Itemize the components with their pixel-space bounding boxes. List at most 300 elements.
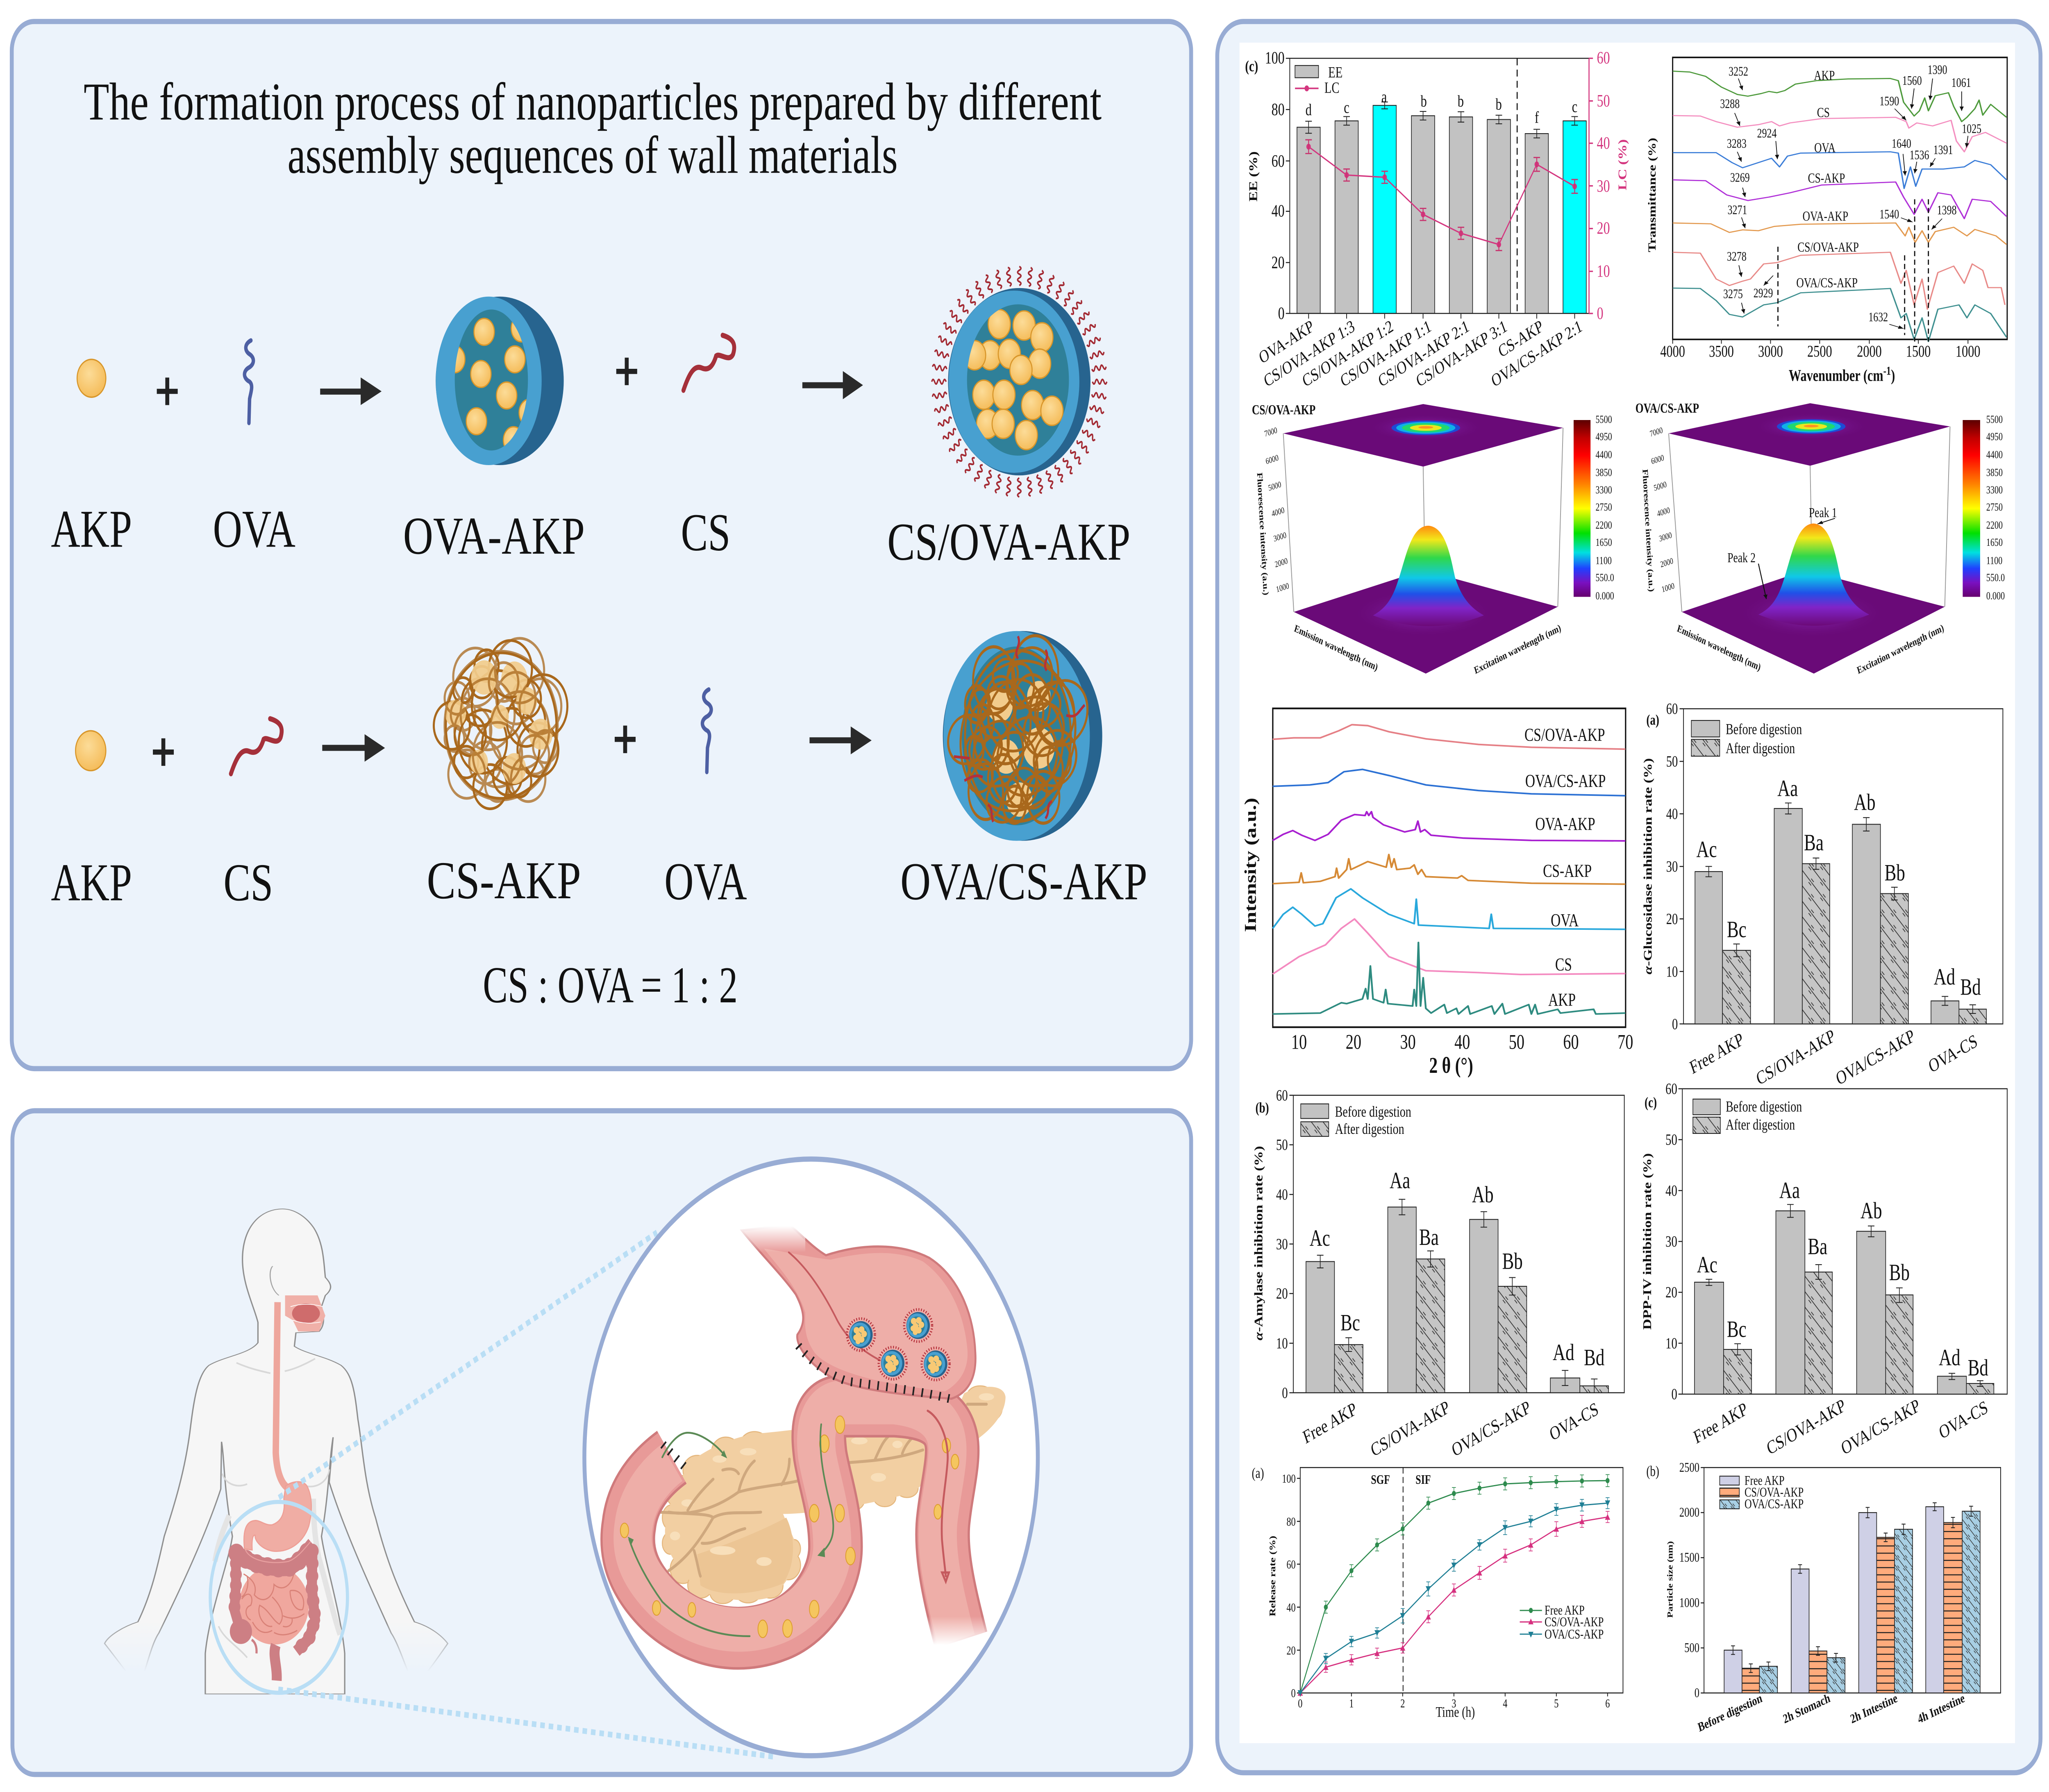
left tick labels: 100 xyxy=(1265,49,1285,68)
value labels: Ad xyxy=(1939,1345,1960,1370)
value labels: Ab xyxy=(1472,1182,1494,1208)
colorbar labels: 2200 xyxy=(1595,520,1612,531)
arrow: red xyxy=(928,1411,949,1582)
chart: 3D fluorescence OVA/CS-AKP: Excitation wavelength (nm) xyxy=(1856,622,1945,676)
peak annotations: 1632 xyxy=(1868,310,1888,325)
peak annotations: 3278 xyxy=(1727,250,1747,264)
x axis title: 2 θ (°) xyxy=(1429,1054,1473,1078)
LC line xyxy=(1308,147,1574,245)
sutures xyxy=(663,1346,952,1470)
tick labels: 40 xyxy=(1666,806,1678,823)
category labels: CS/OVA-AKP 2:1 xyxy=(1376,316,1472,391)
legend xyxy=(1295,64,1343,97)
categories xyxy=(1300,1396,1601,1460)
peak annotations: 3252 xyxy=(1729,65,1748,79)
chart: FTIR spectra xyxy=(1646,57,2007,384)
axis titles: Time (h) xyxy=(1436,1703,1475,1720)
chart: release rate xyxy=(1252,1465,1623,1720)
icon: intestine tube xyxy=(628,1402,961,1640)
axis labels: 3000 xyxy=(1658,530,1673,544)
chart: 3D fluorescence CS/OVA-AKP: Fluorescence intensity (a.u.) xyxy=(1255,472,1271,596)
icon: CS/OVA-AKP particle xyxy=(932,266,1107,497)
peak labels: Peak 2 xyxy=(1727,550,1756,566)
legend: Before digestion xyxy=(1335,1104,1411,1120)
left tick labels: 40 xyxy=(1272,202,1285,221)
panel letter: (a) xyxy=(1252,1465,1264,1481)
category labels xyxy=(1257,316,1585,391)
letters: c xyxy=(1344,98,1349,117)
chart: 3D fluorescence CS/OVA-AKP: Excitation wavelength (nm) xyxy=(1473,622,1562,676)
categories: 2h Intestine xyxy=(1849,1691,1899,1726)
title: The formation process of nanoparticles prepared by different xyxy=(84,72,1102,131)
x ticks xyxy=(1291,1030,1633,1054)
title: OVA/CS-AKP xyxy=(1636,401,1699,416)
legend xyxy=(1301,1104,1411,1138)
left tick labels: 20 xyxy=(1272,254,1285,273)
axis titles: Wavenumber (cm xyxy=(1789,366,1883,384)
right tick labels xyxy=(1597,49,1610,323)
categories: CS/OVA-AKP xyxy=(1754,1024,1837,1089)
tick labels: 60 xyxy=(1666,700,1678,718)
arrow xyxy=(320,377,382,405)
row 2 labels: OVA/CS-AKP xyxy=(900,852,1147,911)
curve names: CS/OVA-AKP xyxy=(1524,725,1605,745)
chart: XRD patterns xyxy=(1241,709,1633,1078)
curve names: OVA/CS-AKP xyxy=(1796,275,1858,291)
arrow xyxy=(809,727,872,754)
categories: OVA-CS xyxy=(1547,1398,1601,1445)
curve names: CS xyxy=(1817,105,1830,120)
chart: particle size xyxy=(1646,1460,2001,1735)
right tick labels: 30 xyxy=(1597,177,1610,196)
letters: b xyxy=(1421,92,1427,110)
axis labels: 5000 xyxy=(1653,479,1667,493)
value labels xyxy=(1697,1177,1988,1381)
value labels: Ac xyxy=(1696,836,1717,862)
right tick labels: 10 xyxy=(1597,262,1610,281)
letters: f xyxy=(1535,108,1539,127)
tick labels xyxy=(1679,1460,1699,1700)
panel: digestion xyxy=(12,1111,1191,1774)
curve names: OVA-AKP xyxy=(1535,814,1595,834)
value labels: Ba xyxy=(1808,1233,1827,1259)
peak annotations: 3283 xyxy=(1727,136,1747,151)
axis titles xyxy=(1245,58,1629,202)
arrow xyxy=(322,734,385,762)
peak annotations: 3269 xyxy=(1730,170,1750,185)
y axis title: Release rate (%) xyxy=(1268,1536,1277,1616)
tick labels: 5 xyxy=(1554,1697,1558,1710)
row 1 labels xyxy=(51,499,1130,571)
peak annotations: 3275 xyxy=(1723,287,1743,301)
panel letter: (c) xyxy=(1645,1095,1657,1111)
plus sign xyxy=(616,358,637,385)
category labels: CS/OVA-AKP 1:3 xyxy=(1261,316,1357,391)
EE bars xyxy=(1297,102,1586,313)
tick labels: 40 xyxy=(1665,1182,1677,1199)
categories: OVA/CS-AKP xyxy=(1449,1396,1533,1460)
categories: Before digestion xyxy=(1697,1691,1764,1735)
x tick labels: 3500 xyxy=(1709,342,1734,361)
panel letter: (b) xyxy=(1646,1463,1659,1479)
right tick labels: 50 xyxy=(1597,92,1610,111)
legend: After digestion xyxy=(1726,740,1795,757)
axes xyxy=(1286,58,1589,319)
x ticks: 20 xyxy=(1346,1030,1361,1054)
value labels: Bb xyxy=(1889,1259,1910,1285)
value labels: Ba xyxy=(1804,829,1824,855)
x tick labels: 1000 xyxy=(1956,342,1981,361)
title: CS/OVA-AKP xyxy=(1252,402,1315,418)
plus sign xyxy=(153,738,174,766)
tick labels xyxy=(1666,700,1678,1033)
colorbar labels: 4400 xyxy=(1986,449,2003,461)
peak annotations: 1640 xyxy=(1892,136,1911,151)
axis labels: 2000 xyxy=(1274,556,1288,570)
peak labels: Peak 1 xyxy=(1809,505,1837,520)
peak annotations: 1540 xyxy=(1879,207,1899,222)
colorbar labels: 0.000 xyxy=(1595,590,1614,602)
value labels: Ad xyxy=(1553,1339,1574,1365)
colorbar labels: 4950 xyxy=(1986,431,2003,443)
colorbar labels: 4400 xyxy=(1595,449,1612,461)
value labels: Bb xyxy=(1502,1248,1523,1274)
letters: b xyxy=(1458,92,1464,110)
plus sign xyxy=(157,377,178,405)
colorbar labels: 0.000 xyxy=(1986,590,2005,602)
tick labels: 40 xyxy=(1286,1601,1296,1614)
left tick labels: 60 xyxy=(1272,152,1285,171)
colorbar labels: 4950 xyxy=(1595,431,1612,443)
colorbar labels: 3300 xyxy=(1595,484,1612,496)
released capsules xyxy=(620,1416,959,1638)
row 2 labels: CS xyxy=(223,853,273,912)
peak annotations: 1398 xyxy=(1937,203,1957,218)
region labels xyxy=(1371,1473,1431,1487)
tick labels: 1 xyxy=(1349,1697,1354,1710)
categories: OVA-CS xyxy=(1936,1396,1990,1443)
tick labels: 0 xyxy=(1671,1386,1677,1403)
categories: 2h Stomach xyxy=(1781,1691,1832,1726)
letters: b xyxy=(1496,95,1502,113)
left tick labels: 80 xyxy=(1272,100,1285,119)
CS/OVA-AKP curve xyxy=(1300,1511,1608,1693)
category labels: CS/OVA-AKP 1:1 xyxy=(1338,316,1433,391)
error bars xyxy=(1733,1503,1971,1672)
chart: 3D fluorescence CS/OVA-AKP: Emission wavelength (nm) xyxy=(1293,622,1379,673)
right tick labels: 20 xyxy=(1597,219,1610,238)
axis titles: (c) xyxy=(1245,58,1258,75)
ratio caption: CS : OVA = 1 : 2 xyxy=(483,957,738,1014)
left tick labels: 0 xyxy=(1278,304,1285,323)
peak annotations: 1560 xyxy=(1902,74,1922,88)
tick labels: 1000 xyxy=(1679,1595,1699,1610)
value labels xyxy=(1696,775,1981,1000)
value labels: Bd xyxy=(1960,974,1981,1000)
value labels: Ad xyxy=(1934,964,1955,990)
curve names: CS-AKP xyxy=(1543,861,1592,881)
peak annotations: 1061 xyxy=(1951,76,1971,90)
axis title: α-Amylase inhibition rate (%) xyxy=(1252,1146,1265,1340)
tick labels: 30 xyxy=(1276,1236,1288,1253)
tick labels: 4 xyxy=(1503,1697,1507,1710)
SGF/SIF divider xyxy=(1403,1467,1404,1693)
curve names: OVA-AKP xyxy=(1803,209,1848,224)
axis titles: EE (%) xyxy=(1247,151,1260,202)
curve names: OVA xyxy=(1551,911,1579,930)
tick labels: 100 xyxy=(1282,1472,1296,1485)
categories: Free AKP xyxy=(1687,1028,1746,1078)
legend: Free AKP xyxy=(1745,1473,1785,1488)
chart: 3D fluorescence CS/OVA-AKP xyxy=(1252,402,1614,676)
peak annotations: 1391 xyxy=(1933,143,1953,157)
legend: Before digestion xyxy=(1726,721,1802,738)
value labels: Ab xyxy=(1860,1198,1882,1224)
tick labels: 20 xyxy=(1666,911,1678,928)
tick labels: 30 xyxy=(1666,858,1678,875)
category labels: OVA-AKP xyxy=(1257,316,1316,368)
tick labels: 50 xyxy=(1665,1131,1677,1149)
categories: OVA/CS-AKP xyxy=(1838,1395,1922,1459)
bars xyxy=(1695,803,1986,1024)
letters xyxy=(1306,88,1577,127)
axis labels: 4000 xyxy=(1271,505,1285,519)
region labels: SIF xyxy=(1415,1473,1431,1487)
categories: Free AKP xyxy=(1691,1398,1750,1448)
title: assembly sequences of wall materials xyxy=(288,125,898,184)
row 2: OVA/CS-AKP assembly xyxy=(51,614,1147,912)
colorbar labels: 1100 xyxy=(1595,555,1612,567)
axis titles: -1 xyxy=(1883,364,1891,377)
peak annotations: 2929 xyxy=(1754,286,1773,300)
y axis title: Intensity (a.u.) xyxy=(1241,798,1260,932)
peak annotations: 1390 xyxy=(1928,63,1947,77)
bars xyxy=(1724,1507,1980,1693)
axis labels xyxy=(1263,425,1290,595)
axis labels: 4000 xyxy=(1656,505,1671,519)
panel: formation process xyxy=(12,21,1191,1069)
legend: OVA/CS-AKP xyxy=(1745,1497,1804,1512)
letters: a xyxy=(1381,88,1387,106)
icon: CS chain xyxy=(231,719,282,774)
categories: 4h Intestine xyxy=(1916,1691,1966,1726)
x tick labels: 2500 xyxy=(1807,342,1832,361)
curve names: AKP xyxy=(1548,990,1576,1010)
colorbar labels xyxy=(1986,414,2005,602)
peak annotations: 3288 xyxy=(1720,97,1740,111)
region labels: SGF xyxy=(1371,1473,1390,1487)
zoom ring xyxy=(210,1502,348,1693)
row 2 labels xyxy=(51,851,1147,912)
axis labels: 6000 xyxy=(1650,453,1665,466)
x tick labels: 4000 xyxy=(1660,342,1685,361)
axis title: Particle size (nm) xyxy=(1666,1541,1674,1618)
tick labels xyxy=(1282,1472,1610,1710)
legend: OVA/CS-AKP xyxy=(1545,1627,1604,1642)
legend: EE xyxy=(1328,64,1343,81)
curve names: CS xyxy=(1555,954,1572,974)
x tick labels: 3000 xyxy=(1758,342,1783,361)
axis title: α-Glucosidase inhibition rate (%) xyxy=(1642,758,1654,974)
chart: 3D fluorescence OVA/CS-AKP: Fluorescence intensity (a.u.) xyxy=(1641,469,1656,592)
tick labels xyxy=(1665,1081,1677,1403)
curve names xyxy=(1524,725,1606,1010)
tick labels: 10 xyxy=(1276,1335,1288,1352)
value labels: Bb xyxy=(1885,860,1905,886)
chart: alpha-glucosidase xyxy=(1642,700,2003,1089)
colorbar labels: 2750 xyxy=(1986,502,2003,513)
arrow xyxy=(802,371,863,399)
right tick labels: 0 xyxy=(1597,304,1604,323)
tick labels: 6 xyxy=(1605,1697,1610,1710)
category labels: OVA/CS-AKP 2:1 xyxy=(1489,316,1585,391)
categories xyxy=(1697,1691,1966,1735)
curve names: OVA xyxy=(1814,140,1836,156)
x tick labels: 1500 xyxy=(1906,342,1931,361)
value labels: Bc xyxy=(1727,916,1747,942)
chart: 3D fluorescence OVA/CS-AKP: Emission wavelength (nm) xyxy=(1676,622,1762,673)
categories xyxy=(1691,1395,1990,1459)
tick labels: 60 xyxy=(1665,1081,1677,1097)
value labels xyxy=(1310,1167,1604,1370)
title xyxy=(84,72,1102,184)
peak labels xyxy=(1727,505,1837,566)
category labels: CS/OVA-AKP 3:1 xyxy=(1414,316,1509,391)
arrows: green xyxy=(628,1424,833,1636)
right tick labels: 40 xyxy=(1597,134,1610,153)
colorbar labels: 3850 xyxy=(1595,467,1612,479)
tick labels: 10 xyxy=(1665,1335,1677,1352)
bars xyxy=(1695,1204,1994,1394)
row 2 labels: OVA xyxy=(664,852,747,911)
nanoparticles in stomach xyxy=(847,1309,950,1380)
categories: CS/OVA-AKP xyxy=(1764,1395,1848,1459)
row 1: CS/OVA-AKP assembly xyxy=(51,266,1130,571)
colorbar labels: 550.0 xyxy=(1595,572,1614,584)
legend: After digestion xyxy=(1726,1117,1795,1133)
tick labels: 80 xyxy=(1286,1515,1296,1529)
icon: human body with digestive tract xyxy=(93,1209,461,1694)
row 2 labels: AKP xyxy=(51,853,132,912)
panel letter: (b) xyxy=(1255,1099,1269,1116)
tick labels: 50 xyxy=(1276,1137,1288,1154)
axis titles: ) xyxy=(1891,366,1895,384)
peak annotations: 3271 xyxy=(1728,203,1747,217)
legend xyxy=(1520,1603,1604,1642)
colorbar labels: 1100 xyxy=(1986,555,2002,567)
tick labels: 2500 xyxy=(1679,1460,1699,1475)
tick labels: 3 xyxy=(1452,1697,1456,1710)
axis title: DPP-IV inhibition rate (%) xyxy=(1641,1153,1654,1330)
categories: CS/OVA-AKP xyxy=(1368,1396,1452,1460)
value labels: Bd xyxy=(1584,1345,1604,1370)
tick labels: 0 xyxy=(1282,1385,1288,1401)
icon: OVA/CS-AKP particle xyxy=(936,620,1109,847)
zoom circle: organs xyxy=(584,1159,1038,1756)
value labels: Ac xyxy=(1697,1251,1717,1277)
axis labels: 7000 xyxy=(1649,425,1663,439)
curve names: CS/OVA-AKP xyxy=(1797,240,1859,255)
categories: Free AKP xyxy=(1300,1398,1359,1448)
peak annotations: 2924 xyxy=(1757,126,1776,141)
XRD curves xyxy=(1273,725,1625,1014)
curve names: AKP xyxy=(1814,68,1835,83)
value labels: Bc xyxy=(1340,1310,1360,1335)
right tick labels: 60 xyxy=(1597,49,1610,68)
legend xyxy=(1720,1473,1804,1512)
value labels: Aa xyxy=(1390,1167,1410,1193)
plus sign xyxy=(615,726,636,753)
row 1 labels: OVA xyxy=(213,499,295,558)
x ticks: 10 xyxy=(1291,1030,1307,1054)
tick labels: 1500 xyxy=(1679,1550,1699,1565)
legend: Before digestion xyxy=(1726,1099,1802,1115)
value labels: Bd xyxy=(1968,1355,1988,1381)
y axis title: Transmittance (%) xyxy=(1646,138,1658,252)
tick labels xyxy=(1276,1087,1288,1401)
legend: CS/OVA-AKP xyxy=(1545,1615,1604,1629)
category labels: CS/OVA-AKP 1:2 xyxy=(1300,316,1395,391)
tick labels: 20 xyxy=(1665,1284,1677,1301)
tick labels: 2 xyxy=(1400,1697,1405,1710)
row 1 labels: OVA-AKP xyxy=(403,506,585,565)
peak annotations: 1536 xyxy=(1910,148,1929,162)
tick labels: 60 xyxy=(1276,1087,1288,1104)
x ticks: 60 xyxy=(1563,1030,1579,1054)
axis labels: 5000 xyxy=(1268,479,1282,493)
row 1 labels: AKP xyxy=(51,499,132,558)
row 1 labels: CS/OVA-AKP xyxy=(887,512,1130,571)
axis titles: LC (%) xyxy=(1616,139,1629,190)
axis labels: 1000 xyxy=(1275,581,1290,595)
row 2 labels: CS-AKP xyxy=(427,851,581,910)
chart: 3D fluorescence OVA/CS-AKP xyxy=(1636,401,2005,676)
icon: pancreas xyxy=(659,1386,1006,1603)
letters: c xyxy=(1572,98,1577,116)
legend: LC xyxy=(1324,79,1339,97)
tick labels: 60 xyxy=(1286,1558,1296,1571)
value labels: Ac xyxy=(1310,1225,1330,1251)
curve names xyxy=(1796,68,1859,291)
tick labels: 0 xyxy=(1672,1016,1678,1033)
OVA/CS-AKP curve xyxy=(1300,1498,1608,1693)
x ticks: 30 xyxy=(1400,1030,1416,1054)
icon: OVA-AKP particle xyxy=(436,297,564,465)
tick labels: 40 xyxy=(1276,1186,1288,1204)
colorbar labels: 2200 xyxy=(1986,520,2003,531)
letters: d xyxy=(1306,100,1312,119)
tick labels: 500 xyxy=(1684,1640,1699,1655)
x ticks: 50 xyxy=(1509,1030,1524,1054)
colorbar labels: 550.0 xyxy=(1986,572,2005,584)
tick labels: 20 xyxy=(1276,1286,1288,1302)
x ticks: 40 xyxy=(1454,1030,1470,1054)
colorbar labels: 1650 xyxy=(1595,537,1612,549)
legend: Free AKP xyxy=(1545,1603,1585,1618)
x tick labels: 2000 xyxy=(1857,342,1882,361)
colorbar labels: 2750 xyxy=(1595,502,1612,513)
tick labels: 20 xyxy=(1286,1644,1296,1657)
chart: DPP-IV xyxy=(1641,1081,2007,1459)
tick labels: 0 xyxy=(1298,1697,1302,1710)
value labels: Ba xyxy=(1419,1224,1439,1250)
x tick labels xyxy=(1660,342,1981,361)
tick labels: 0 xyxy=(1695,1685,1699,1700)
icon: CS-AKP particle xyxy=(422,614,589,833)
LC error bars xyxy=(1308,140,1574,250)
tick labels: 2000 xyxy=(1679,1505,1699,1520)
tick labels: 30 xyxy=(1665,1233,1677,1250)
